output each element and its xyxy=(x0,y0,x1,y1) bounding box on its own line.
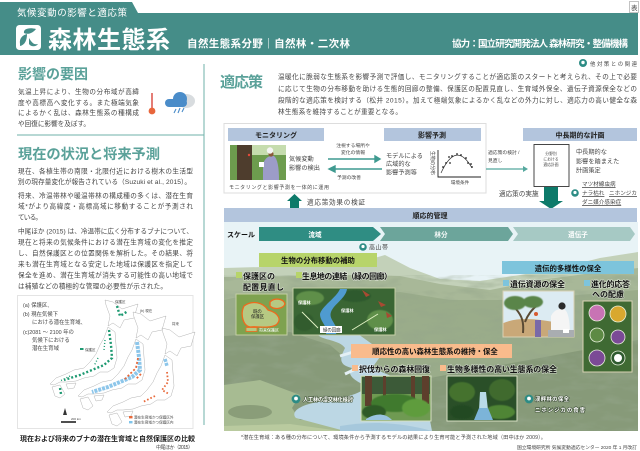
label: evolutionary response xyxy=(584,279,630,299)
header: plan: 中長期的な計画 xyxy=(556,130,604,140)
text: model xyxy=(386,152,423,176)
icon: forest logo xyxy=(16,25,41,50)
panel: mid- to long-term plan xyxy=(523,128,637,186)
header kicker: 気候変動の影響と適応策 xyxy=(17,7,127,19)
callout: alpine zone: 高山帯 xyxy=(369,244,388,252)
text: current status: 保全を進め、潜在生育域が消失する可能性の高い地域で xyxy=(18,270,193,280)
image: green corridor: 保護林 xyxy=(341,307,354,314)
icon: rain cloud xyxy=(165,92,195,113)
header: impact projection: 影響予測 xyxy=(418,130,446,140)
legend: related measures pin xyxy=(579,59,638,68)
banner: genetic diversity: 遺伝的多様性の保全 xyxy=(535,264,602,273)
footnote: *潜在生育域：ある種の分布について、環境条件から予測するモデルの結果により生育可能と予測された地域（田中ほか 2009）。 xyxy=(241,433,546,441)
label: protected area review: 保護区の xyxy=(243,271,275,281)
text: impact factors xyxy=(18,87,139,128)
map a: protected areas: 保護区 xyxy=(85,347,96,352)
map c: future habitat: 将来 xyxy=(172,321,179,326)
text: model: モデルによる xyxy=(386,152,423,160)
map a: protected areas: 保護区 xyxy=(115,299,126,304)
text: adaptation: 温暖化に脆弱な生態系を影響予測で評価し、モニタリングすることが適応策のスタートと考えられ、その上で必要 xyxy=(278,72,637,81)
document: adaptation plan: 分野別 xyxy=(545,151,557,156)
text: current status: 現在、各植生帯の南限・北限付近における樹木の生活型 xyxy=(18,166,193,176)
chevron: watershed: 流域 xyxy=(308,230,322,239)
chevron: watershed xyxy=(259,227,381,241)
callout: plantation xyxy=(292,395,354,404)
image: evolutionary response xyxy=(583,301,632,372)
banner: genetic diversity xyxy=(502,261,634,274)
image: protected area map: 既の xyxy=(253,309,262,315)
cooperation credit: 協力：国立研究開発法人 森林研究・整備機構 xyxy=(452,38,628,50)
band: adaptive management: 順応的管理 xyxy=(412,211,448,220)
map b: current habitat: (b) 現在 xyxy=(140,308,153,313)
text: plan description xyxy=(576,148,619,174)
image: genetic resources xyxy=(503,291,574,337)
document: adaptation plan: における xyxy=(543,156,559,162)
title: 森林生態系 xyxy=(48,27,170,54)
panel: current status and projections xyxy=(18,145,193,290)
label: protected area review: 配置見直し xyxy=(243,282,284,292)
callout: related pests: マツ材線虫病 xyxy=(582,180,616,188)
arrow: verification: 適応策効果の検証 xyxy=(307,198,365,206)
callout: related pests: ナラ枯れ xyxy=(582,189,605,197)
banner: assisted migration xyxy=(259,253,377,267)
chart: species response curve: 生物の分布 xyxy=(429,151,436,175)
text: arrow labels xyxy=(336,142,370,181)
callout: riparian forest: 渓畔林の保全 xyxy=(535,395,570,403)
text: current status: し、自然保護区との位置関係を解析した。その結果、将 xyxy=(18,248,193,258)
panel: impact factors xyxy=(18,66,195,128)
map b: current habitat xyxy=(78,308,166,410)
legend: related measures pin: 他対策との関連 xyxy=(590,60,638,68)
text: adaptation: に応じて生物の分布移動を助ける生態的回廊の整備、保護区の配置見直し、生育域外保全、遺伝子資源保全などの xyxy=(278,84,637,93)
map legend text xyxy=(23,301,86,352)
column divider xyxy=(203,64,205,425)
map legend text: (c)2081 〜 2100 年の xyxy=(23,328,74,336)
chart: species response curve xyxy=(429,150,481,186)
map a: protected areas xyxy=(50,299,138,398)
chart: species response curve: 環境条件 xyxy=(451,179,470,186)
tab: 表: 表 xyxy=(631,3,638,12)
map caption: 現在および将来のブナの潜在生育域と自然保護区の比較 xyxy=(20,434,195,443)
callout: related pests: ニホンジカ xyxy=(609,190,637,197)
photo: field survey xyxy=(230,145,286,180)
panel: beech habitat maps xyxy=(18,296,195,428)
icon: thermometer xyxy=(149,93,155,114)
text: current status xyxy=(18,166,193,290)
label: selective logging recovery: 択伐からの森林回復 xyxy=(359,364,430,374)
text: current status: 来も潜在生育域となる安定した地域は保護区を指定して xyxy=(18,260,193,268)
header: monitoring xyxy=(228,128,324,141)
chevron: genes: 遺伝子 xyxy=(568,230,588,239)
callout: riparian forest: ニホンジカの食害 xyxy=(535,406,586,414)
header: monitoring: モニタリング xyxy=(255,130,297,140)
arrow: info to projection xyxy=(328,156,380,162)
text: current status: 将来、冷温帯林や暖温帯林の構成種の多くは、潜在生育 xyxy=(18,191,193,200)
text: impact factors: や回復に影響を及ぼす。 xyxy=(18,119,90,128)
banner: assisted migration: 生物の分布移動の補助 xyxy=(281,256,355,265)
text: current status: 現在と将来の気候条件における潜在生育域の変化を推定 xyxy=(18,238,193,246)
text: model: 広域的な xyxy=(386,160,411,168)
image: green corridor: 保護林 xyxy=(298,299,311,306)
text: detection xyxy=(289,155,320,172)
banner: resilient forest ecosystems: 順応性の高い森林生態系の維持・保全 xyxy=(372,347,498,356)
text: current status: 中尾ほか (2015) は、冷温帯に広く分布するブナについて、 xyxy=(18,226,193,236)
subtitle: 自然生態系分野｜自然林・二次林 xyxy=(187,37,350,50)
image: protected area map xyxy=(236,294,287,335)
document: adaptation plan xyxy=(534,144,569,186)
callout: related pests: ダニ媒介感染症 xyxy=(582,198,622,206)
north arrow and scale: 200 km xyxy=(71,417,81,421)
text: arrow labels: 注視する場所や xyxy=(336,142,370,149)
document: adaptation plan: 適応計画 xyxy=(543,162,559,167)
text: current status: 別の現存量変化が報告されている（Suzuki et al., 2015）。 xyxy=(18,177,191,186)
illustration: landscape xyxy=(224,222,638,431)
text: impact factors: 度や高標高へ変化する。また極端気象 xyxy=(18,98,139,107)
divider xyxy=(17,134,204,136)
map legend colors: 潜在生育域かつ保護区外 xyxy=(134,415,174,420)
text: detection: 気候変動 xyxy=(289,155,314,163)
text: arrow labels: 予測の改善 xyxy=(337,174,361,181)
text: current status: 域*がより高緯度・高標高域に移動することが予測され xyxy=(18,202,193,210)
callout: related pests xyxy=(571,180,637,206)
header band xyxy=(0,2,638,55)
map legend text: における潜在生育域、 xyxy=(32,318,86,326)
map legend colors xyxy=(129,415,174,425)
text: impact factors: 気温上昇により、生物の分布域が高緯 xyxy=(18,87,139,96)
label: evolutionary response: 進化的応答 xyxy=(591,279,630,289)
river xyxy=(294,334,432,431)
text: current status: ている。 xyxy=(18,214,42,222)
image: forest recovery xyxy=(361,376,431,421)
map legend text: 気候下における xyxy=(32,336,70,344)
text: adaptation: 段階的な適応策を検討する（松井 2015）。加えて極端気象によるかく乱などの外力に対し、適応力の高い健全な森 xyxy=(278,96,637,104)
image: protected area map: 保護区 xyxy=(251,313,265,320)
map legend text: 潜在生育域 xyxy=(32,344,60,352)
heading: current status: 現在の状況と将来予測 xyxy=(18,145,160,163)
chevron: stand xyxy=(380,227,513,241)
chevron: stand: 林分 xyxy=(434,230,448,239)
tab: 表 xyxy=(630,2,638,12)
label: protected area review xyxy=(236,271,284,292)
banner: resilient forest ecosystems xyxy=(351,344,512,358)
arrow: projection to monitoring xyxy=(329,166,382,172)
arrow: implementation xyxy=(499,187,563,209)
text: detection: 影響の検出 xyxy=(289,164,320,172)
label: biodiverse ecosystems: 生物多様性の高い生態系の保全 xyxy=(447,364,557,374)
north arrow and scale xyxy=(61,408,81,422)
arrow: impact projection to plan xyxy=(486,149,528,172)
header: impact projection xyxy=(384,128,481,141)
callout: plantation: 人工林の混交林化検討 xyxy=(303,396,354,404)
text: arrow labels: 変化の情報 xyxy=(341,149,365,156)
image: waterfall forest xyxy=(447,376,517,421)
text: integrated operation: モニタリングと影響予測を一体的に運用 xyxy=(229,184,329,191)
map c: future habitat xyxy=(107,321,195,426)
image: green corridor: 緑の回廊 xyxy=(323,326,341,334)
image: green corridor: 保護林 xyxy=(374,326,387,333)
text: model: 影響予測等 xyxy=(386,168,417,176)
callout: alpine zone xyxy=(359,243,388,252)
panel: monitoring and impact projection xyxy=(224,124,486,193)
band: adaptive management xyxy=(224,208,637,222)
arrow: impact projection to plan: 適応策の検討 / xyxy=(488,149,520,156)
text: plan description: 影響を踏まえた xyxy=(576,158,619,166)
label: genetic resources: 遺伝資源の保全 xyxy=(510,279,565,289)
chevron: genes xyxy=(513,227,635,241)
heading: adaptation: 適応策 xyxy=(220,73,263,91)
scale label: スケール xyxy=(227,231,255,239)
arrow: verification xyxy=(287,194,365,209)
map legend text: (b) 現在気候下 xyxy=(23,310,59,318)
image: protected area map: 将来保護区 xyxy=(259,326,279,332)
image: green corridor xyxy=(293,288,395,335)
text: adaptation: 林生態系を維持することが重要となる。 xyxy=(278,107,402,116)
text: plan description: 中長期的な xyxy=(576,148,607,156)
label: evolutionary response: への配慮 xyxy=(592,289,624,299)
heading: impact factors: 影響の要因 xyxy=(18,66,88,82)
arrow: impact projection to plan: 見直し xyxy=(488,157,503,164)
map source: 中尾ほか（2015） xyxy=(156,444,193,451)
label: habitat connectivity: 生息地の連結（緑の回廊） xyxy=(302,271,392,281)
text: adaptation xyxy=(278,72,637,116)
arrow: implementation: 適応策の実施 xyxy=(499,189,539,198)
map legend text: (a) 保護区、 xyxy=(23,301,53,309)
scale chevrons xyxy=(259,227,635,241)
map legend colors: 潜在生育域かつ保護区内 xyxy=(134,420,174,425)
text: plan description: 計画策定 xyxy=(576,166,601,174)
credit: 国立環境研究所 気候変動適応センター 2020 年 1 月改訂 xyxy=(517,444,637,451)
text: current status: は補殖などの積極的な管理の必要性が示された。 xyxy=(18,282,167,290)
callout: riparian forest xyxy=(525,395,586,414)
text: impact factors: によるかく乱は、森林生態系の種構成 xyxy=(18,108,139,117)
